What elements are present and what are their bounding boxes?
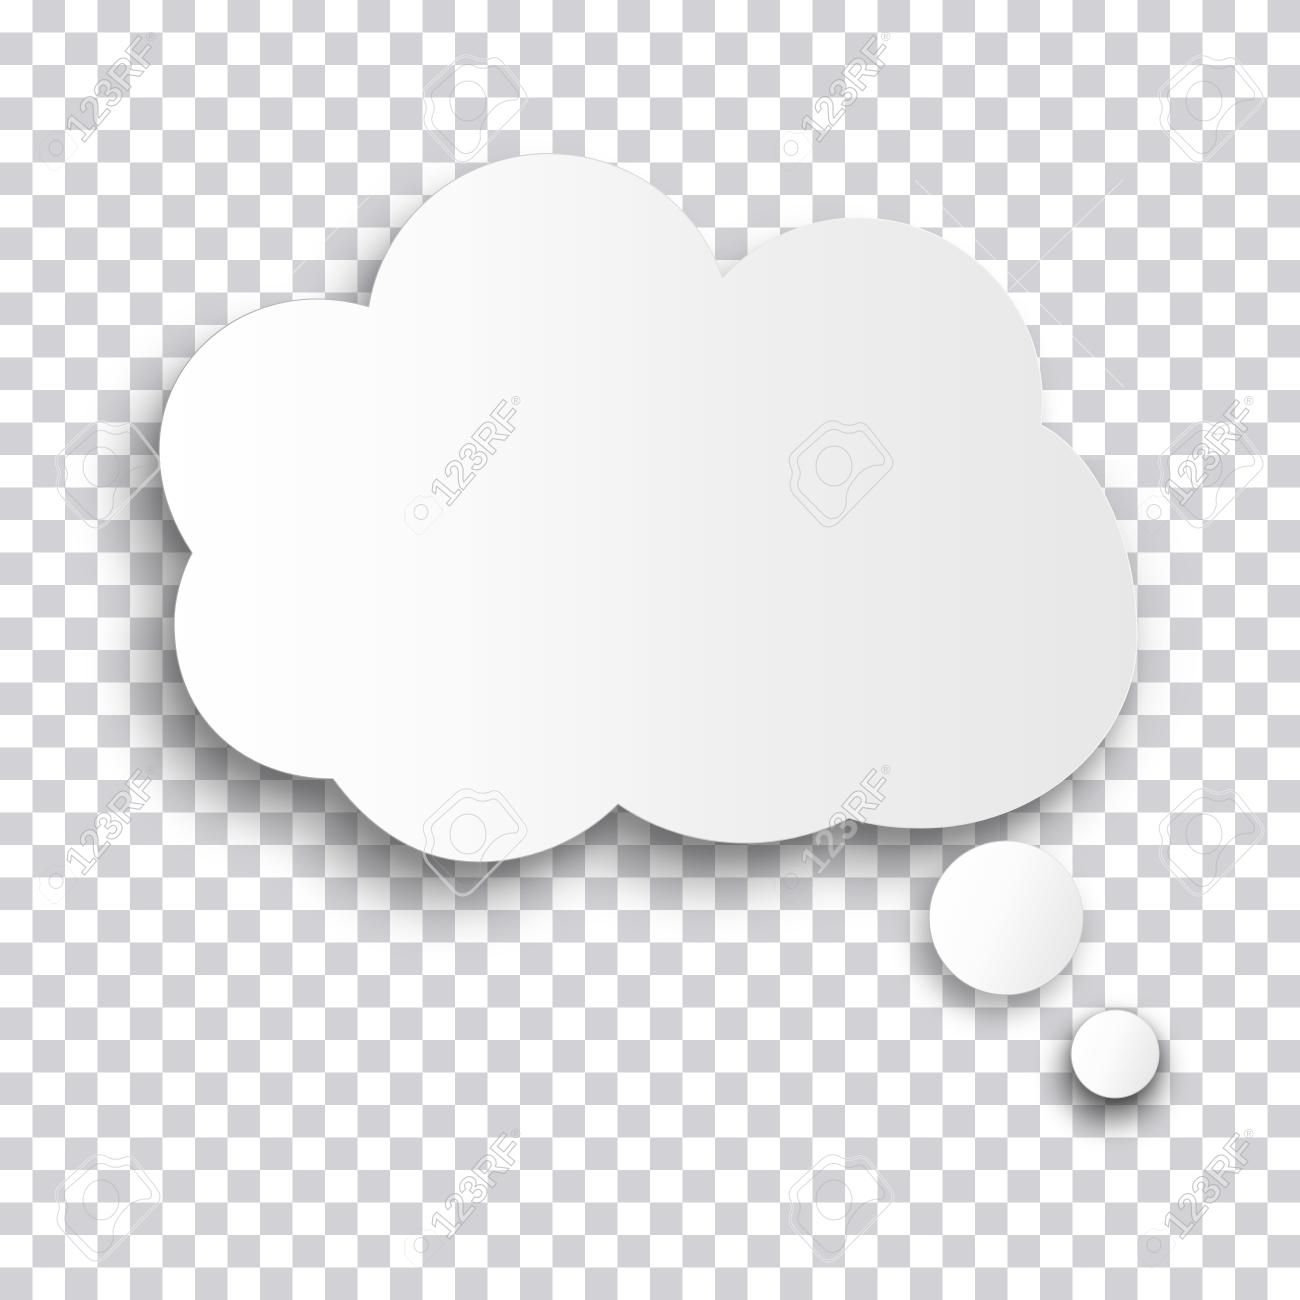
small watermark logo: 123RF bbox=[56, 763, 167, 883]
watermark emblem bbox=[423, 56, 527, 162]
small watermark logo: ® bbox=[881, 29, 891, 44]
watermark emblem bbox=[789, 1155, 893, 1261]
medium thought circle bbox=[919, 841, 1083, 1012]
small watermark logo: 123RF bbox=[421, 1127, 532, 1247]
small watermark logo: ® bbox=[146, 29, 156, 44]
small watermark logo: 123RF bbox=[791, 763, 902, 883]
small watermark logo: ® bbox=[146, 762, 156, 777]
watermark emblem bbox=[1159, 56, 1263, 162]
watermark emblem bbox=[56, 422, 160, 528]
watermark emblem bbox=[789, 421, 893, 527]
small watermark logo: ® bbox=[511, 1126, 521, 1141]
small watermark logo: ® bbox=[1244, 393, 1254, 408]
small watermark logo: ® bbox=[511, 393, 521, 408]
watermark emblem bbox=[1159, 422, 1263, 528]
watermark emblem bbox=[1159, 789, 1263, 895]
faint diagonal watermark lines bbox=[293, 180, 1128, 1126]
watermark emblem bbox=[56, 1155, 160, 1261]
small watermark logo: 123RF bbox=[791, 30, 902, 150]
small watermark logo: 123RF bbox=[56, 30, 167, 150]
thought cloud bubble bbox=[159, 154, 1137, 862]
small watermark logo: ® bbox=[1244, 1126, 1254, 1141]
small watermark logo: 123RF bbox=[1154, 1127, 1265, 1247]
watermark emblem bbox=[423, 789, 527, 895]
small watermark logo: 123RF bbox=[421, 394, 532, 514]
small thought circle bbox=[1062, 1010, 1162, 1122]
small watermark logo: 123RF bbox=[1154, 394, 1265, 514]
cloud drop shadow bbox=[127, 164, 1151, 904]
small watermark logo: ® bbox=[881, 762, 891, 777]
